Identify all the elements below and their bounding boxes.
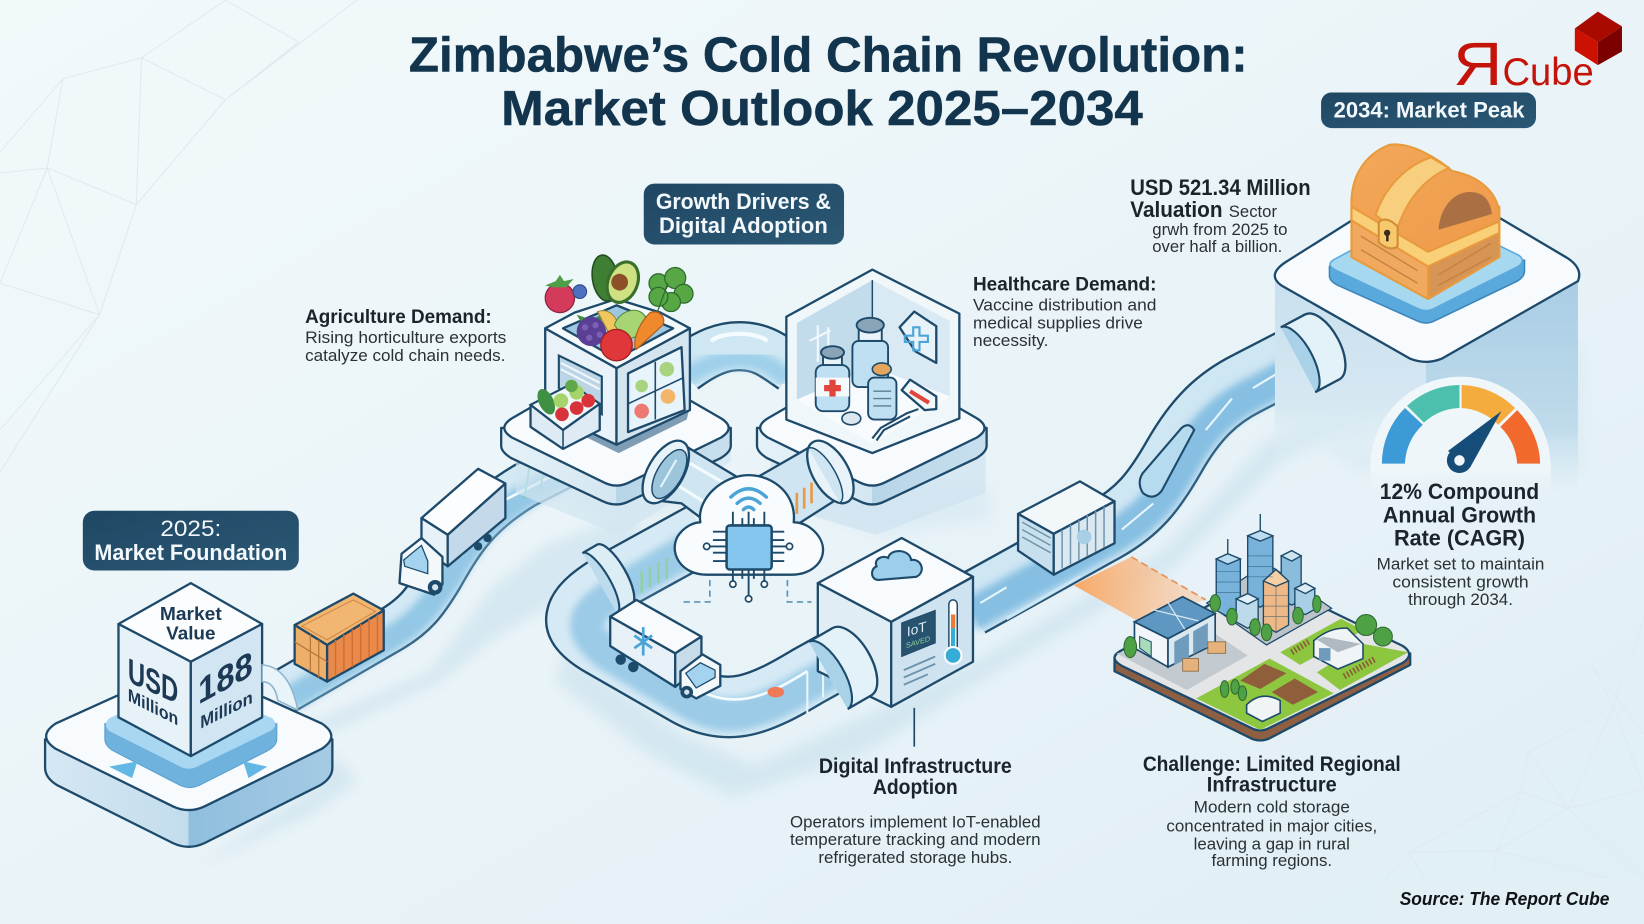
small vial bbox=[868, 363, 896, 420]
blue pad bbox=[1329, 210, 1524, 323]
market value cube bbox=[118, 583, 262, 756]
label: 2034: 2034: Market Peak bbox=[1334, 98, 1525, 123]
source bbox=[1384, 879, 1644, 924]
thermometer bbox=[945, 600, 961, 664]
market value cube: Million bbox=[200, 688, 253, 734]
market value cube: 188 bbox=[198, 643, 253, 713]
platform: agriculture bbox=[501, 361, 731, 535]
pipe collar: to platform bbox=[1281, 306, 1355, 392]
text: digital infrastructure adoption: Adoption bbox=[873, 776, 958, 799]
text: agriculture demand: Rising horticulture exports bbox=[305, 328, 506, 347]
pipe: foundation to agriculture bbox=[283, 451, 592, 698]
produce on top bbox=[545, 253, 693, 361]
text: challenge: Modern cold storage bbox=[1194, 799, 1350, 817]
pipe: right connector to cloud bbox=[739, 433, 863, 535]
text: CAGR: Market set to maintain bbox=[1377, 555, 1544, 573]
icon: IoT box bbox=[818, 538, 973, 707]
market value cube: Million bbox=[128, 685, 178, 730]
collar: IoT box bbox=[809, 619, 888, 709]
label: 2025: 2025: bbox=[160, 516, 221, 541]
title: Zimbabwe’s Cold Chain Revolution: bbox=[409, 27, 1248, 82]
glass door bbox=[628, 347, 685, 432]
text: agriculture demand: Agriculture Demand: bbox=[305, 306, 492, 328]
text: challenge: leaving a gap in rural bbox=[1194, 835, 1350, 853]
icon: treasure chest bbox=[1351, 144, 1499, 299]
pipe: to market peak bbox=[970, 350, 1311, 619]
icon: refrigerated truck bbox=[610, 600, 720, 698]
screen: SAVED bbox=[906, 634, 931, 650]
text: USD 521.34 million valuation: Sector bbox=[1229, 203, 1278, 221]
text: healthcare demand: Healthcare Demand: bbox=[973, 274, 1156, 296]
text: USD 521.34 million valuation: over half a billion. bbox=[1152, 237, 1282, 256]
text: digital infrastructure adoption bbox=[790, 755, 1041, 867]
needle bbox=[1447, 411, 1501, 473]
lettuce bbox=[649, 268, 693, 315]
market value cube: USD bbox=[128, 650, 178, 712]
icon: city and farmland tile bbox=[1115, 514, 1410, 740]
text: challenge: Infrastructure bbox=[1207, 774, 1337, 797]
text: healthcare demand: Vaccine distribution and bbox=[973, 295, 1156, 314]
text: CAGR: Annual Growth bbox=[1383, 502, 1536, 527]
pedestal bbox=[105, 682, 277, 788]
icon: healthcare cabinet bbox=[786, 270, 959, 453]
logo cube bbox=[1575, 12, 1622, 65]
text: digital infrastructure adoption: refrigerated storage hubs. bbox=[818, 849, 1012, 867]
text: digital infrastructure adoption: temperature tracking and modern bbox=[790, 831, 1041, 849]
right collar bbox=[798, 433, 863, 511]
text: CAGR: 12% Compound bbox=[1380, 479, 1539, 504]
carrot bbox=[635, 312, 664, 349]
market value cube: Market bbox=[160, 603, 222, 624]
icon: pipe thermometer bbox=[1140, 425, 1194, 497]
label: growth drivers: Digital Adoption bbox=[659, 213, 828, 238]
pipe: left connector to cloud bbox=[633, 433, 760, 535]
logo: The Report Cube bbox=[1453, 12, 1622, 98]
pipe: digital loop bbox=[577, 533, 855, 715]
syringe bbox=[872, 409, 918, 441]
vegetable drawer bbox=[531, 380, 600, 449]
text: digital infrastructure adoption: Digital Infrastructure bbox=[819, 755, 1012, 778]
label: 2025: Market Foundation bbox=[94, 540, 287, 565]
text: CAGR: consistent growth bbox=[1392, 573, 1529, 591]
label: growth drivers bbox=[644, 184, 844, 244]
text: challenge: farming regions. bbox=[1212, 852, 1332, 870]
text: healthcare demand: necessity. bbox=[973, 331, 1048, 350]
title bbox=[409, 27, 1248, 136]
text: CAGR bbox=[1377, 479, 1544, 609]
text: healthcare demand bbox=[973, 274, 1156, 350]
collar: loop pipe top bbox=[582, 539, 642, 613]
supply box bbox=[902, 380, 936, 410]
fences bbox=[1292, 642, 1376, 676]
text: USD 521.34 million valuation: USD 521.34 Million bbox=[1130, 175, 1311, 200]
ground quadrants bbox=[1117, 563, 1408, 730]
text: agriculture demand: catalyze cold chain needs. bbox=[305, 346, 505, 365]
text: USD 521.34 million valuation: grwh from 2025 to bbox=[1152, 220, 1288, 239]
icon: orange shipping container bbox=[295, 594, 384, 682]
pipe collar bbox=[262, 665, 298, 710]
platform: healthcare bbox=[757, 361, 987, 535]
source: Source: The Report Cube bbox=[1400, 888, 1609, 909]
chip bbox=[704, 512, 793, 602]
label: 2034 bbox=[1321, 92, 1536, 128]
callout line: digital infrastructure bbox=[913, 708, 915, 747]
platform: 2025 market foundation bbox=[45, 583, 332, 847]
pipe: arch between agriculture and healthcare bbox=[684, 334, 793, 380]
text: agriculture demand bbox=[305, 306, 506, 365]
gauge segments bbox=[1382, 385, 1540, 464]
fridge body bbox=[545, 299, 690, 453]
pill bbox=[842, 412, 861, 425]
dashed links bbox=[684, 580, 812, 602]
dashed link: orange gap bbox=[1074, 557, 1206, 620]
text: challenge bbox=[1143, 753, 1401, 870]
text: challenge: concentrated in major cities, bbox=[1166, 818, 1377, 836]
logo: The Report Cube: Я bbox=[1453, 30, 1502, 98]
tall vial bbox=[852, 318, 888, 387]
label: 2025 bbox=[83, 511, 299, 571]
text: CAGR: through 2034. bbox=[1408, 591, 1513, 609]
gauge: CAGR bbox=[1370, 377, 1551, 493]
text: healthcare demand: medical supplies drive bbox=[973, 313, 1143, 332]
screen bbox=[902, 610, 935, 656]
title: Market Outlook 2025–2034 bbox=[501, 81, 1143, 136]
wifi bbox=[731, 489, 766, 510]
text: USD 521.34 million valuation bbox=[1130, 175, 1311, 256]
logo: The Report Cube: Cube bbox=[1502, 51, 1594, 94]
icon: truck on first pipe bbox=[399, 469, 505, 595]
arrow markers bbox=[109, 761, 267, 778]
lock bbox=[1379, 220, 1398, 248]
text: challenge: Challenge: Limited Regional bbox=[1143, 753, 1401, 776]
icon: container on pipe bbox=[1018, 481, 1115, 575]
barns bbox=[1247, 628, 1363, 721]
towers bbox=[1216, 514, 1315, 632]
ground shadows bbox=[199, 346, 1583, 865]
text: digital infrastructure adoption: Operators implement IoT-enabled bbox=[790, 813, 1041, 831]
platform: 2034 market peak bbox=[1275, 184, 1579, 493]
icon: IoT cloud with chip bbox=[675, 475, 823, 602]
text: USD 521.34 million valuation: Valuation bbox=[1130, 197, 1223, 222]
grapes bbox=[577, 313, 606, 346]
raspberry bbox=[545, 275, 587, 313]
left collar bbox=[633, 433, 699, 511]
vial with cross bbox=[816, 346, 849, 411]
avocado bbox=[589, 253, 644, 307]
text: CAGR: Rate (CAGR) bbox=[1394, 525, 1525, 550]
trees bbox=[1124, 595, 1392, 701]
screen: IoT bbox=[907, 618, 927, 640]
market value cube: Value bbox=[166, 623, 215, 644]
medical kit box bbox=[900, 312, 936, 363]
tomato bbox=[601, 329, 632, 361]
warehouse bbox=[1134, 597, 1226, 671]
icon: fridge with produce bbox=[531, 253, 693, 453]
label: growth drivers: Growth Drivers & bbox=[656, 189, 831, 214]
